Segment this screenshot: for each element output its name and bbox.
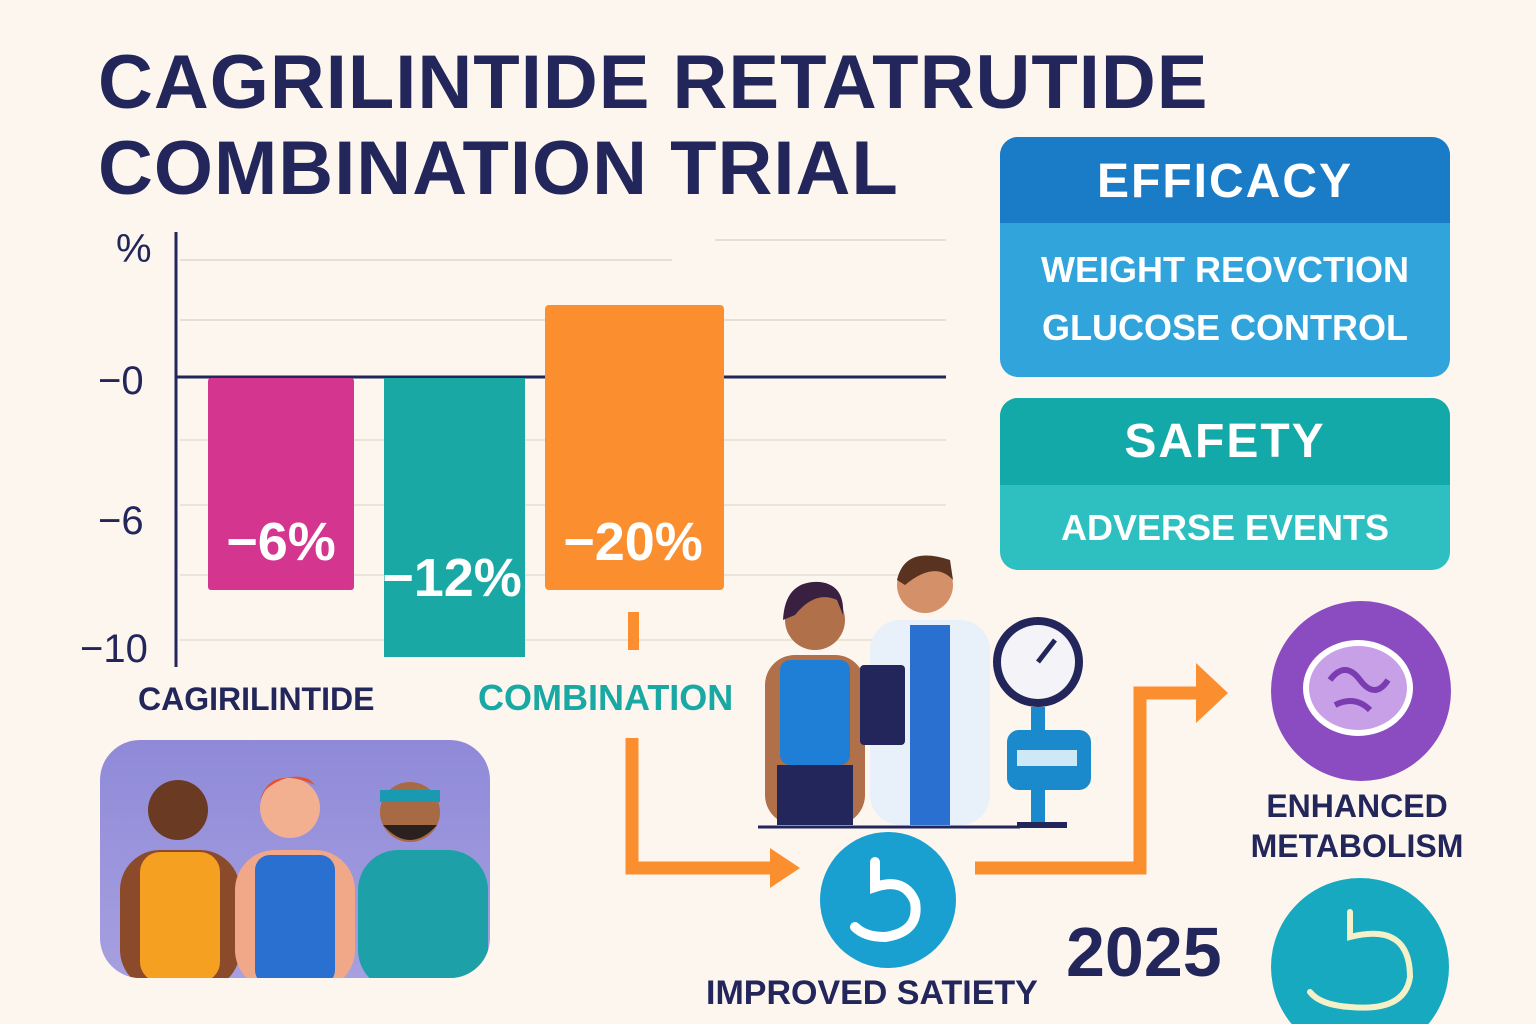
title: COMBINATION TRIAL [98,126,899,211]
efficacy items: WEIGHT REOVCTION [1041,249,1409,290]
label: enhanced metabolism: ENHANCED [1266,788,1448,824]
bar chart: −0 [98,359,144,403]
icon: stomach [1271,878,1449,1024]
title: CAGRILINTIDE RETATRUTIDE [98,40,1208,125]
year: 2025 [1066,913,1222,991]
bar: combination [545,305,724,590]
bar: cagrilintide [208,378,354,590]
efficacy heading [1000,137,1450,223]
bar chart: −20% [563,512,703,572]
label: improved satiety: IMPROVED SATIETY [706,974,1038,1012]
safety heading [1000,398,1450,485]
panel: safety [1000,398,1450,570]
safety item: ADVERSE EVENTS [1061,507,1389,548]
efficacy items [1041,249,1409,348]
people illustration [100,740,490,978]
bar: retatrutide [384,378,525,657]
doctor and patient illustration [758,556,1091,828]
bar chart: COMBINATION [478,677,733,718]
panel: efficacy [1000,137,1450,377]
bar chart: −12% [382,548,522,608]
bar chart: −6 [98,499,144,543]
icon: stomach satiety [820,832,956,968]
label: enhanced metabolism [1251,788,1463,864]
efficacy heading: EFFICACY [1097,155,1353,208]
icon: metabolism [1271,601,1451,781]
bar chart: −10 [80,627,148,671]
title [98,40,1208,211]
bar chart: % [116,227,152,271]
bar chart: CAGIRILINTIDE [138,681,374,717]
safety heading: SAFETY [1124,415,1326,468]
efficacy items: GLUCOSE CONTROL [1042,307,1408,348]
label: enhanced metabolism: METABOLISM [1251,828,1463,864]
bar chart: −6% [226,512,336,572]
